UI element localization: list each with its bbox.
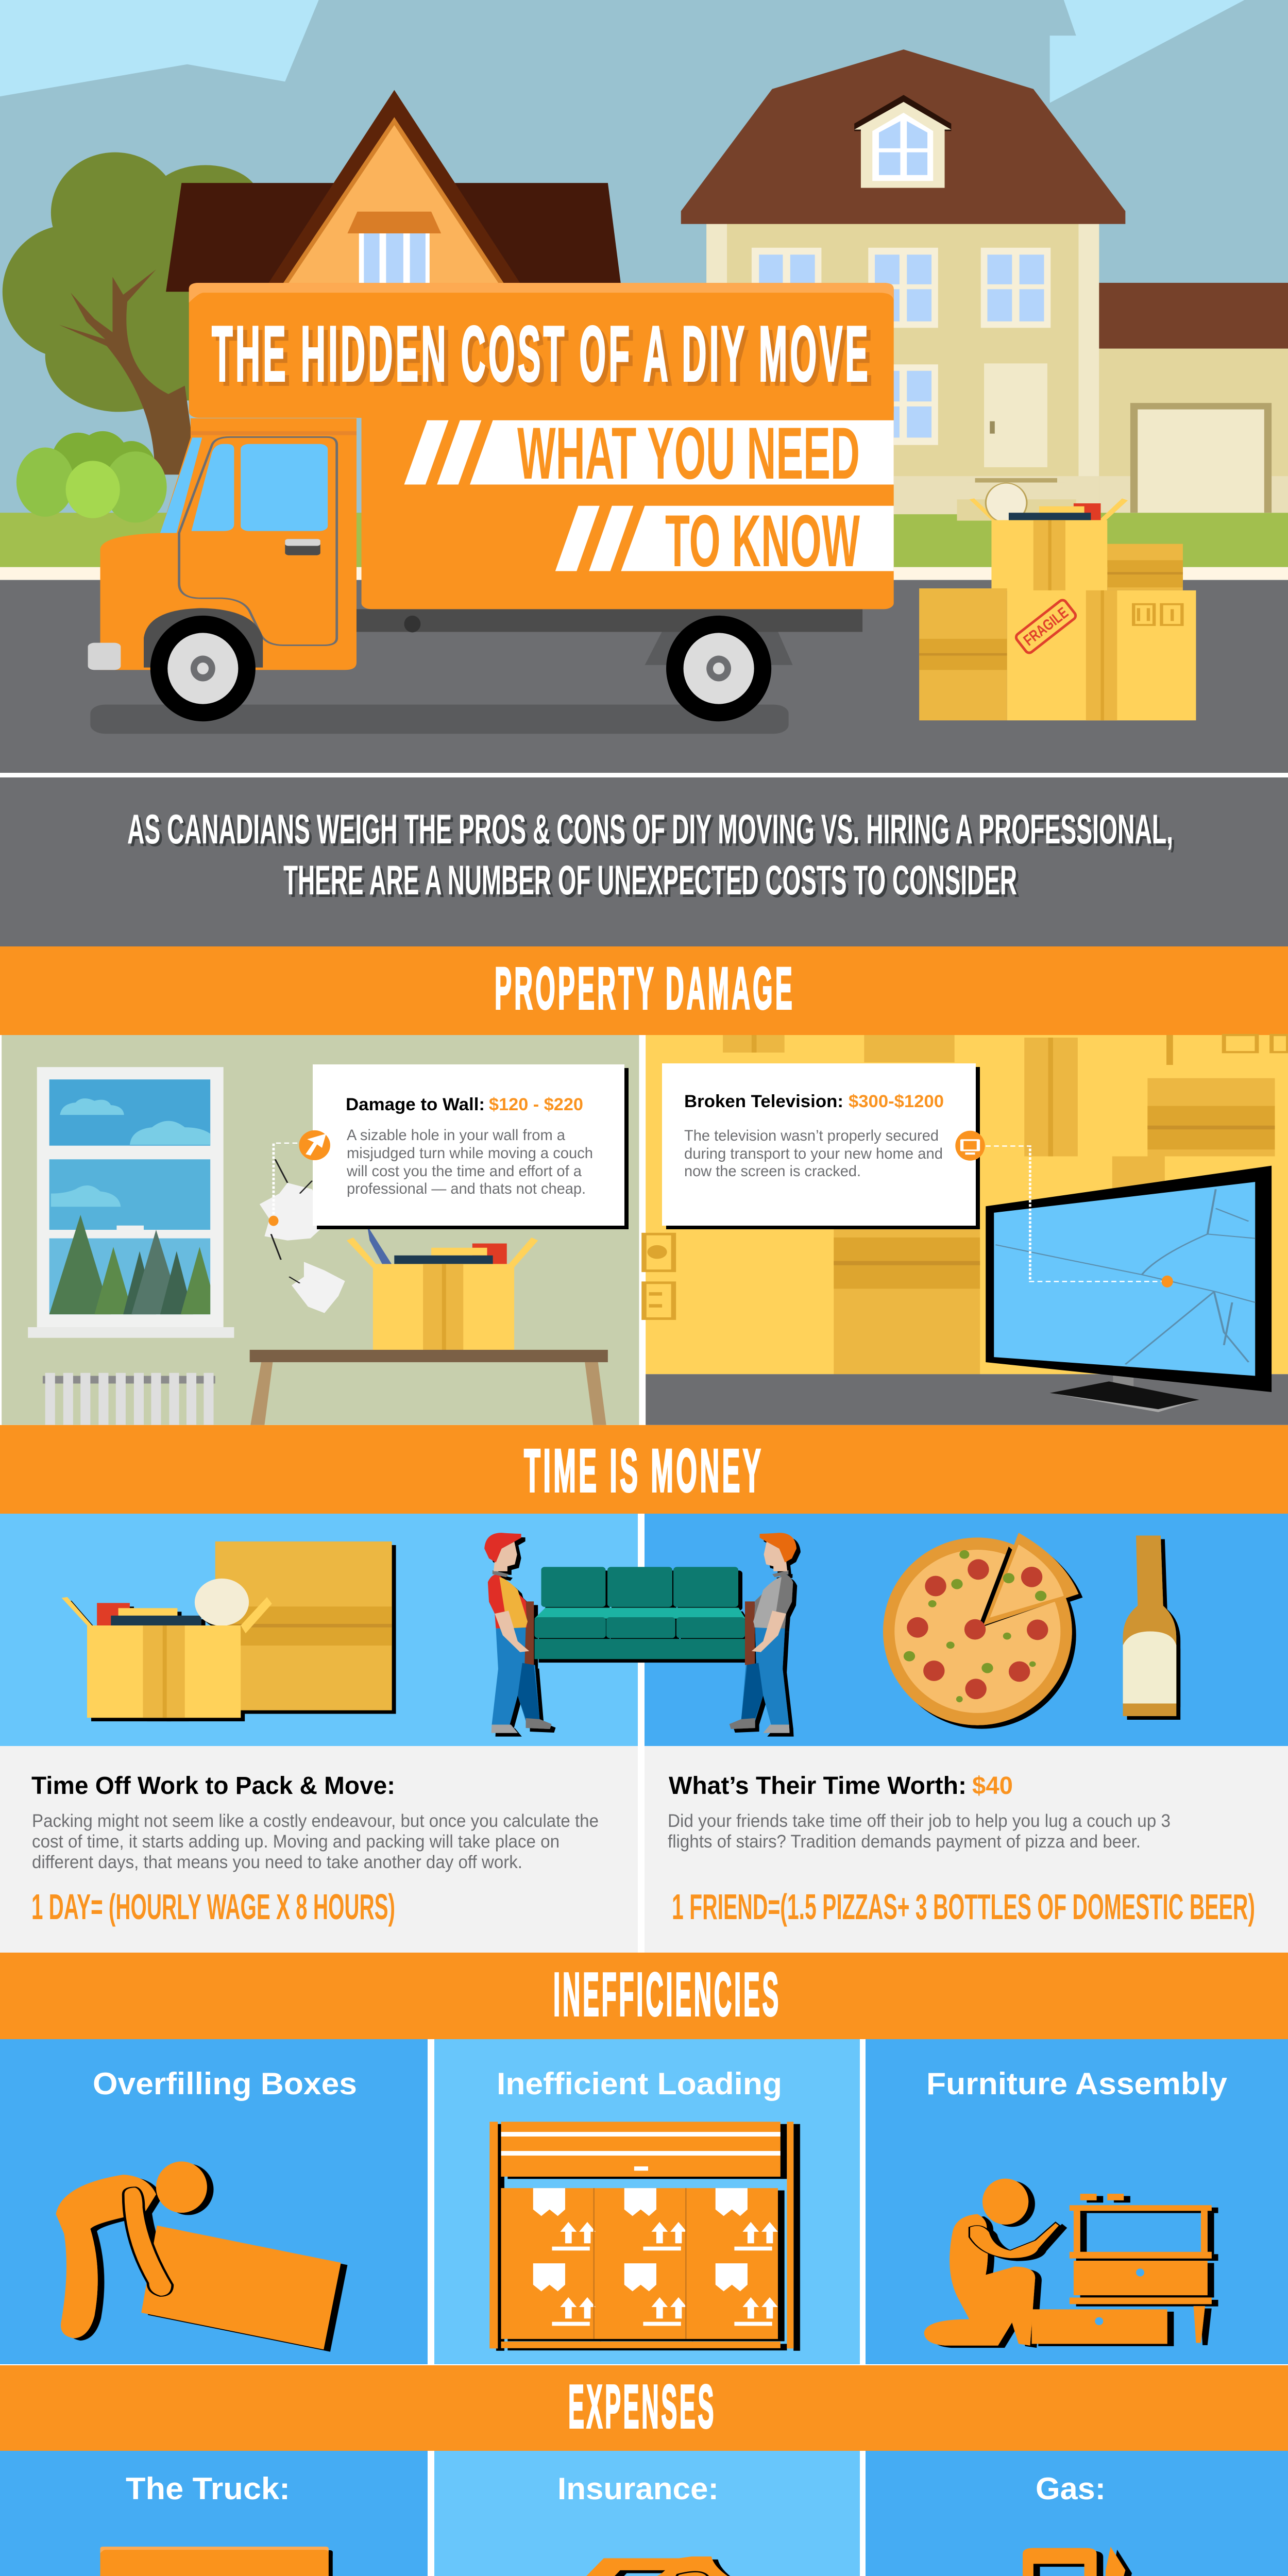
- panel: furniture assembly: [866, 2039, 1288, 2364]
- body copy: different days, that means you need to take another day off work.: [32, 1852, 522, 1872]
- callout body: [346, 1127, 593, 1197]
- callout body: A sizable hole in your wall from a: [347, 1127, 565, 1144]
- icon: person assembling drawers: [924, 2179, 1212, 2346]
- house: right two-storey: [681, 49, 1125, 521]
- callout body: will cost you the time and effort of a: [346, 1163, 582, 1180]
- section header: inefficiencies: INEFFICIENCIES: [553, 1960, 781, 2029]
- panel: gas: [866, 2451, 1288, 2576]
- panel: hero street scene: [0, 0, 1288, 773]
- illustration: pizza and beer: [883, 1533, 1176, 1725]
- body copy: [668, 1811, 1171, 1852]
- callout body: The television wasn’t properly secured: [684, 1127, 939, 1144]
- panel: time off work: [0, 1514, 638, 1953]
- callout body: during transport to your new home and: [684, 1145, 943, 1162]
- text block: friends' time: [668, 1772, 1255, 1927]
- fragile stamp: FRAGILE: [1021, 604, 1072, 649]
- callout heading: Broken Television:: [684, 1092, 843, 1111]
- panel: intro banner: [0, 773, 1288, 946]
- callout heading: Damage to Wall:: [346, 1095, 485, 1114]
- heading: Inefficient Loading: [497, 2066, 782, 2101]
- callout price: $300-$1200: [849, 1092, 944, 1111]
- callout body: misjudged turn while moving a couch: [347, 1145, 593, 1162]
- heading: Furniture Assembly: [926, 2066, 1228, 2101]
- callout body: professional — and thats not cheap.: [347, 1180, 586, 1197]
- section header: property damage: PROPERTY DAMAGE: [495, 956, 795, 1022]
- callout: broken television: [662, 1063, 976, 1226]
- section header: expenses: EXPENSES: [568, 2372, 716, 2441]
- price: $40: [972, 1772, 1013, 1800]
- section header: inefficiencies: [0, 1953, 1288, 2039]
- heading: Time Off Work to Pack & Move:: [31, 1772, 395, 1800]
- heading: Overfilling Boxes: [93, 2066, 357, 2101]
- body copy: Packing might not seem like a costly endeavour, but once you calculate the: [32, 1811, 599, 1831]
- house: garage: [1099, 283, 1288, 513]
- panel: damage to wall: [2, 1035, 639, 1425]
- tree and bushes: [3, 152, 271, 522]
- section header: property damage: [0, 946, 1288, 1035]
- wall room illustration: [2, 1035, 639, 1425]
- subtitle: what you need: WHAT YOU NEED: [517, 413, 860, 495]
- moving truck: [88, 283, 894, 721]
- formula: 1 DAY= (HOURLY WAGE X 8 HOURS): [31, 1887, 395, 1927]
- body copy: [32, 1811, 599, 1872]
- icon: person lifting overfilled box: [56, 2161, 341, 2349]
- panel: inefficient loading: [434, 2039, 860, 2364]
- heading: The Truck:: [126, 2471, 290, 2506]
- stacked boxes background and television: [644, 1035, 1288, 1425]
- heading: Gas:: [1036, 2471, 1106, 2506]
- section header: time is money: TIME IS MONEY: [524, 1437, 764, 1505]
- icon: truck: [67, 2547, 329, 2576]
- callout price: $120 - $220: [489, 1095, 583, 1114]
- icon: gas pump: [1017, 2547, 1125, 2576]
- moving boxes: [919, 483, 1196, 720]
- illustration: two movers carrying a couch: [484, 1533, 796, 1733]
- panel: insurance: [434, 2451, 860, 2576]
- callout body: now the screen is cracked.: [684, 1163, 861, 1180]
- white title stripes on truck: [404, 420, 894, 571]
- panel: broken television: [644, 1035, 1288, 1425]
- section header: expenses: [0, 2365, 1288, 2451]
- icon: hole marker with dashed leader: [268, 1130, 330, 1226]
- body copy: cost of time, it starts adding up. Moving and packing will take place on: [32, 1832, 560, 1852]
- body copy: Did your friends take time off their job to help you lug a couch up 3: [668, 1811, 1171, 1831]
- icon: car and shield: [564, 2556, 740, 2576]
- sky and hills background: [0, 0, 1288, 773]
- text block: time off work: [31, 1772, 599, 1927]
- icon: television marker with dashed leader: [955, 1131, 1173, 1287]
- callout: damage to wall: [313, 1064, 624, 1226]
- fragile stamp: [1014, 599, 1077, 654]
- panel: the truck: [0, 2451, 428, 2576]
- subtitle: to know: TO KNOW: [665, 500, 860, 582]
- heading: What’s Their Time Worth:: [669, 1772, 967, 1800]
- callout body: [684, 1127, 943, 1180]
- divider between time panels: [638, 1514, 645, 1953]
- panel: what's their time worth: [645, 1514, 1288, 1953]
- section header: time is money: [0, 1425, 1288, 1514]
- panel: overfilling boxes: [0, 2039, 428, 2364]
- body copy: flights of stairs? Tradition demands payment of pizza and beer.: [668, 1832, 1141, 1852]
- heading: Insurance:: [557, 2471, 719, 2506]
- house: left a-frame: [166, 90, 622, 292]
- icon: truck loaded with boxes: [489, 2122, 793, 2348]
- illustration: packing boxes: [62, 1541, 392, 1718]
